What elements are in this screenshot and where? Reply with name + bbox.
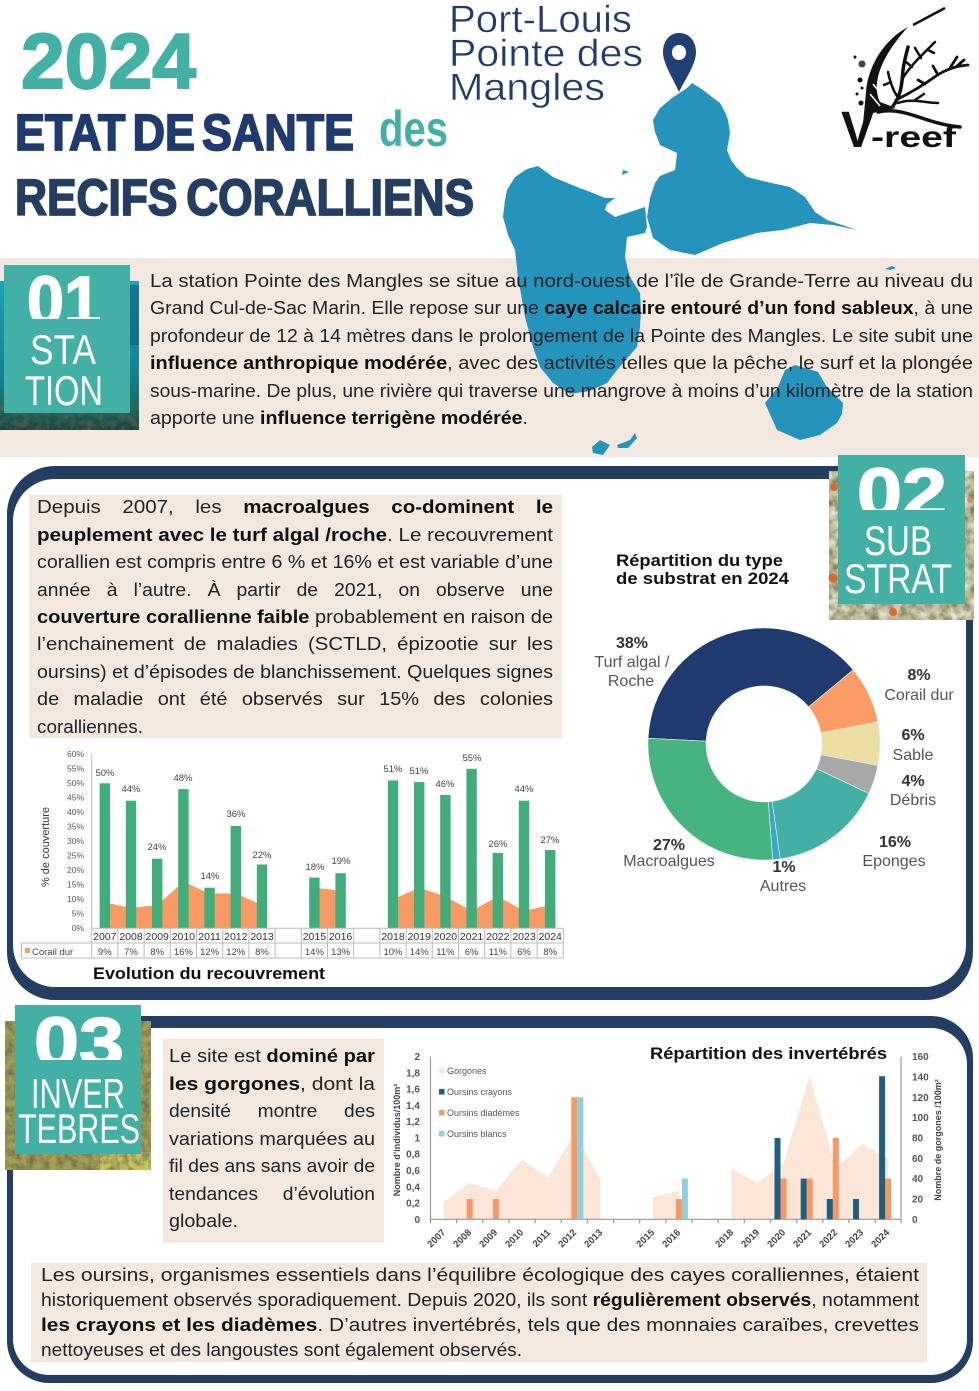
- data table years: 2019: [408, 931, 431, 943]
- y axis labels: 45%: [67, 792, 84, 802]
- year labels: 2024: [869, 1227, 893, 1250]
- bar value labels: 46%: [435, 779, 455, 790]
- data table years: 2022: [486, 931, 510, 943]
- bar value labels: 51%: [409, 766, 429, 777]
- bars: oursins crayons: [774, 1076, 885, 1219]
- year labels: 2015: [634, 1227, 658, 1250]
- left axis labels: 1: [414, 1134, 420, 1144]
- chart: evolution du recouvrement: [22, 749, 563, 958]
- text: station description: influence anthropique modérée , avec des activités telles que la pêche, le surf et la plongée: [150, 353, 973, 373]
- right axis labels: 140: [912, 1073, 929, 1084]
- y axis labels: 5%: [72, 908, 84, 918]
- left axis labels: 0,2: [406, 1198, 420, 1210]
- text block: oursins: nettoyeuses et des langoustes sont également observés.: [41, 1340, 522, 1360]
- left axis labels: 0: [414, 1215, 420, 1226]
- teal tag: [15, 1005, 141, 1154]
- label: corail dur: [884, 667, 954, 704]
- text block: substrat description: coralliennes.: [37, 717, 143, 737]
- bar value labels: 24%: [147, 842, 167, 853]
- label: autres: [760, 859, 806, 895]
- right axis labels: 80: [912, 1134, 924, 1144]
- label SUBSTRAT: SUB: [864, 517, 932, 564]
- label: debris: Débris: [890, 792, 936, 809]
- year labels: 2007: [425, 1227, 448, 1250]
- text block: oursins: historiquement observés sporadiquement. Depuis 2020, ils sont régulièrement observés , notamment: [41, 1290, 919, 1310]
- data table years: 2020: [434, 931, 457, 943]
- label: sable: Sable: [893, 747, 934, 764]
- y axis labels: 20%: [67, 865, 84, 875]
- slice: autres: [768, 801, 780, 860]
- text block: gorgones: les gorgones , dont la: [169, 1074, 376, 1094]
- data table values: 11%: [489, 947, 508, 958]
- bar value labels: 44%: [121, 784, 141, 795]
- area: corail dur: [105, 882, 550, 928]
- label INVERTEBRES: TEBRES: [18, 1105, 140, 1152]
- text block: gorgones: Le site est dominé par: [169, 1046, 375, 1066]
- data table years: 2023: [512, 931, 536, 943]
- left axis labels: 1,8: [406, 1068, 420, 1080]
- label: sable: 6%: [901, 727, 925, 744]
- left axis labels: 0,4: [406, 1182, 420, 1193]
- label: corail dur: Corail dur: [884, 687, 954, 704]
- teal tag: [838, 455, 965, 604]
- text block: substrat description: peuplement avec le turf algal /roche . Le recouvrement: [37, 525, 553, 545]
- text block: oursins: les crayons et les diadèmes . D’autres invertébrés, tels que des monnaies caraïbes, crevettes: [41, 1315, 919, 1335]
- logo: V-reef: [841, 8, 968, 158]
- year labels: 2019: [739, 1227, 762, 1250]
- title: des: des: [379, 101, 448, 157]
- slice: turf algal / roche: [648, 628, 853, 741]
- year labels: [425, 1227, 893, 1250]
- data table values: 12%: [226, 947, 246, 958]
- section header 03: invertebres: [5, 1003, 151, 1170]
- data table years: 2024: [539, 931, 562, 943]
- data table years: 2021: [460, 931, 483, 943]
- photo: substrate: [828, 471, 974, 620]
- text: station description: Grand Cul-de-Sac Marin. Elle repose sur une caye calcaire entouré d’un fond sableux , à une: [150, 298, 973, 318]
- left axis labels: 0,6: [406, 1166, 420, 1177]
- section header 02: substrat: [828, 454, 974, 620]
- label: debris: 4%: [901, 773, 925, 790]
- data table values: 11%: [436, 947, 455, 958]
- data table values: [98, 947, 558, 958]
- text block: substrat description: année à l’autre. À partir de 2021, on observe une: [37, 580, 553, 600]
- y axis labels: 0%: [72, 923, 84, 933]
- chart title: repartition des invertebres: Répartition des invertébrés: [650, 1044, 887, 1063]
- y axis labels: 60%: [67, 749, 84, 759]
- heading: repartition du substrat: de substrat en 2024: [616, 569, 790, 588]
- label: debris: [890, 773, 936, 809]
- bar value labels: [95, 753, 560, 882]
- label INVERTEBRES: [18, 1070, 140, 1152]
- label: turf algal: Roche: [608, 673, 654, 690]
- map: Guadeloupe: [503, 83, 896, 455]
- legend: Oursins blancs: [447, 1129, 507, 1139]
- bar value labels: 48%: [173, 773, 193, 784]
- data table grid: [22, 928, 563, 958]
- bar value labels: 51%: [383, 764, 403, 775]
- data table years: 2011: [198, 931, 221, 943]
- text block: oursins: [31, 1263, 927, 1362]
- data table years: 2013: [250, 931, 274, 943]
- text block: gorgones: variations marquées au: [169, 1129, 375, 1149]
- panel: station background band: [0, 258, 979, 457]
- chart: substrate donut: [648, 628, 880, 860]
- text: station description: La station Pointe des Mangles se situe au nord-ouest de l’île de Grande-Terre au niveau du: [150, 271, 973, 291]
- number 02: 02: [857, 454, 947, 532]
- label STATION: TION: [25, 367, 103, 414]
- label SUBSTRAT: [844, 517, 952, 602]
- slice: debris: [816, 755, 878, 794]
- chart title: evolution du recouvrement: Evolution du recouvrement: [93, 964, 325, 983]
- bar value labels: 44%: [514, 784, 534, 795]
- bar value labels: 36%: [226, 809, 246, 820]
- text block: substrat description: couverture corallienne faible probablement en raison de: [37, 607, 553, 627]
- data table values: 6%: [465, 947, 479, 958]
- data table years: 2009: [146, 931, 169, 943]
- bar value labels: 27%: [540, 835, 560, 846]
- year labels: 2012: [556, 1227, 579, 1250]
- area: gorgones: [444, 1076, 888, 1219]
- title: ETAT DE SANTE: ETAT DE SANTE: [15, 104, 354, 161]
- chart: repartition des invertebres: [392, 1052, 943, 1250]
- data table values: 14%: [410, 947, 429, 958]
- label INVERTEBRES: INVER: [31, 1070, 125, 1117]
- label STATION: [25, 326, 103, 414]
- bar value labels: 19%: [331, 856, 351, 867]
- right axis labels: 120: [912, 1093, 929, 1104]
- year labels: 2021: [791, 1227, 815, 1250]
- data table years: 2007: [93, 931, 117, 943]
- year labels: 2008: [451, 1227, 474, 1250]
- y axis labels: 15%: [67, 880, 84, 890]
- label: corail dur: 8%: [907, 667, 931, 684]
- year labels: 2009: [477, 1227, 500, 1250]
- legend: corail dur: Corail dur: [32, 947, 73, 958]
- site name: Mangles: [449, 67, 605, 109]
- label: turf algal: 38%: [616, 635, 648, 652]
- left axis title: Nombre d’individus/100m²: [392, 1084, 402, 1196]
- label: macroalgues: Macroalgues: [623, 853, 715, 870]
- bar value labels: 50%: [95, 768, 115, 779]
- axis: [91, 754, 93, 928]
- text block: oursins: Les oursins, organismes essentiels dans l’équilibre écologique des cayes coralliennes, étaient: [41, 1265, 919, 1285]
- data table years: 2008: [119, 931, 143, 943]
- data table years: 2012: [224, 931, 248, 943]
- text: station description: apporte une influence terrigène modérée .: [150, 408, 528, 428]
- bar value labels: 18%: [305, 862, 325, 873]
- data table values: 8%: [255, 947, 269, 958]
- y axis labels: [67, 749, 84, 933]
- left axis labels: 1,4: [406, 1101, 420, 1112]
- data table values: 9%: [98, 947, 112, 958]
- y axis labels: 30%: [67, 836, 84, 846]
- text block: substrat description: [29, 495, 562, 738]
- text block: gorgones: fil des ans sans avoir de: [169, 1156, 375, 1176]
- left axis labels: 1,2: [406, 1117, 420, 1128]
- data table values: 16%: [174, 947, 193, 958]
- right axis labels: 160: [912, 1052, 929, 1063]
- data table years: [93, 931, 562, 943]
- data table years: 2015: [303, 931, 326, 943]
- left axis labels: 0,8: [406, 1150, 420, 1161]
- text block: substrat description: Depuis 2007, les macroalgues co-dominent le: [37, 497, 553, 517]
- label: turf algal: Turf algal /: [594, 654, 670, 671]
- data table years: 2016: [329, 931, 352, 943]
- data table values: 6%: [517, 947, 531, 958]
- data table years: 2018: [381, 931, 405, 943]
- left axis labels: [406, 1052, 420, 1226]
- logo: V-reef: V: [841, 101, 874, 158]
- heading: repartition du substrat: Répartition du type: [616, 551, 783, 570]
- slice: sable: [821, 722, 880, 765]
- right axis labels: 20: [912, 1194, 924, 1206]
- data table values: 8%: [150, 947, 165, 958]
- text block: gorgones: [163, 1039, 384, 1243]
- year labels: 2013: [582, 1227, 605, 1250]
- bars: oursins diademes: [467, 1097, 891, 1219]
- y axis labels: 35%: [67, 822, 84, 832]
- photo: reef: [5, 1021, 151, 1170]
- text: station description: [150, 271, 973, 428]
- text block: substrat description: l’enchainement de maladies (SCTLD, épizootie sur les: [37, 634, 553, 654]
- slice: corail dur: [809, 670, 878, 733]
- text: station description: profondeur de 12 à 14 mètres dans le prolongement de la Pointe des Mangles. Le site subit une: [150, 326, 973, 346]
- year labels: 2011: [531, 1227, 554, 1250]
- text block: gorgones: tendances d’évolution: [169, 1184, 375, 1204]
- heading: repartition du substrat: [616, 551, 790, 588]
- text block: substrat description: corallien est compris entre 6 % et 16% et est variable d’une: [37, 552, 553, 572]
- data table values: 7%: [124, 947, 138, 958]
- legend: Oursins diadèmes: [447, 1108, 520, 1118]
- y axis labels: 25%: [67, 850, 84, 860]
- left axis labels: 2: [414, 1052, 420, 1063]
- label SUBSTRAT: STRAT: [844, 555, 952, 602]
- site name: Pointe des: [449, 33, 643, 75]
- photo: underwater scene: [0, 281, 139, 430]
- bars: macroalgues: [100, 769, 555, 928]
- data table values: 10%: [383, 947, 403, 958]
- year labels: 2023: [843, 1227, 866, 1250]
- site name: [449, 0, 643, 109]
- logo: V-reef: -reef: [871, 121, 957, 154]
- right axis labels: 40: [912, 1174, 924, 1185]
- y axis labels: 50%: [67, 778, 84, 788]
- bars: oursins blancs: [577, 1097, 688, 1219]
- right axis labels: [912, 1052, 929, 1226]
- slice: macroalgues: [648, 738, 773, 860]
- label: macroalgues: 27%: [653, 837, 685, 854]
- text: station description: sous-marine. De plus, une rivière qui traverse une mangrove à moins d’un kilomètre de la station: [150, 381, 973, 401]
- bar value labels: 55%: [462, 753, 482, 764]
- label: eponges: Eponges: [862, 853, 926, 870]
- right axis title: Nombre de gorgones /100m²: [933, 1079, 943, 1201]
- label: sable: [893, 727, 934, 764]
- icon: location pin: [663, 33, 696, 92]
- site name: Port-Louis: [449, 0, 632, 41]
- section header 01: station: [0, 262, 139, 430]
- data table values: 12%: [200, 947, 220, 958]
- label: autres: Autres: [760, 878, 806, 895]
- bar value labels: 14%: [200, 871, 220, 882]
- legend: [439, 1066, 520, 1139]
- label: autres: 1%: [772, 859, 796, 876]
- teal tag: [4, 265, 130, 413]
- label: eponges: 16%: [879, 834, 911, 851]
- right axis labels: 0: [912, 1215, 918, 1226]
- label: macroalgues: [623, 837, 715, 870]
- panel: substrat frame: [7, 466, 973, 1000]
- y axis labels: 40%: [67, 807, 84, 817]
- year labels: 2010: [503, 1227, 526, 1250]
- right axis labels: 60: [912, 1154, 924, 1165]
- right axis labels: 100: [912, 1113, 929, 1124]
- text block: gorgones: densité montre des: [169, 1101, 375, 1121]
- number 03: 03: [34, 1003, 124, 1081]
- axes: [430, 1057, 901, 1223]
- y axis title: % de couverture: [40, 807, 52, 887]
- label: turf algal: [594, 635, 670, 690]
- left axis labels: 1,6: [406, 1085, 420, 1096]
- text block: gorgones: globale.: [169, 1211, 238, 1231]
- y axis labels: 55%: [67, 764, 84, 774]
- title: RECIFS CORALLIENS: RECIFS CORALLIENS: [15, 169, 474, 226]
- year labels: 2020: [765, 1227, 788, 1250]
- number 01: 01: [27, 262, 101, 340]
- data table values: 8%: [543, 947, 558, 958]
- text block: substrat description: de maladie ont été observés sur 15% des colonies: [37, 689, 553, 709]
- year labels: 2022: [817, 1227, 840, 1250]
- bar value labels: 22%: [252, 850, 272, 861]
- data table values: 14%: [305, 947, 324, 958]
- bar value labels: 26%: [488, 839, 508, 850]
- data table values: 13%: [331, 947, 351, 958]
- title: year 2024: 2024: [21, 17, 196, 105]
- year labels: 2016: [660, 1227, 683, 1250]
- slice: eponges: [772, 769, 869, 859]
- y axis labels: 10%: [67, 894, 84, 904]
- label: eponges: [862, 834, 926, 870]
- year labels: 2018: [713, 1227, 736, 1250]
- data table years: 2010: [172, 931, 195, 943]
- legend: Oursins crayons: [447, 1087, 513, 1097]
- text block: substrat description: oursins) et d’épisodes de blanchissement. Quelques signes: [37, 662, 553, 682]
- panel: invertebres frame: [7, 1016, 973, 1383]
- legend: Gorgones: [447, 1066, 487, 1076]
- label STATION: STA: [30, 326, 96, 373]
